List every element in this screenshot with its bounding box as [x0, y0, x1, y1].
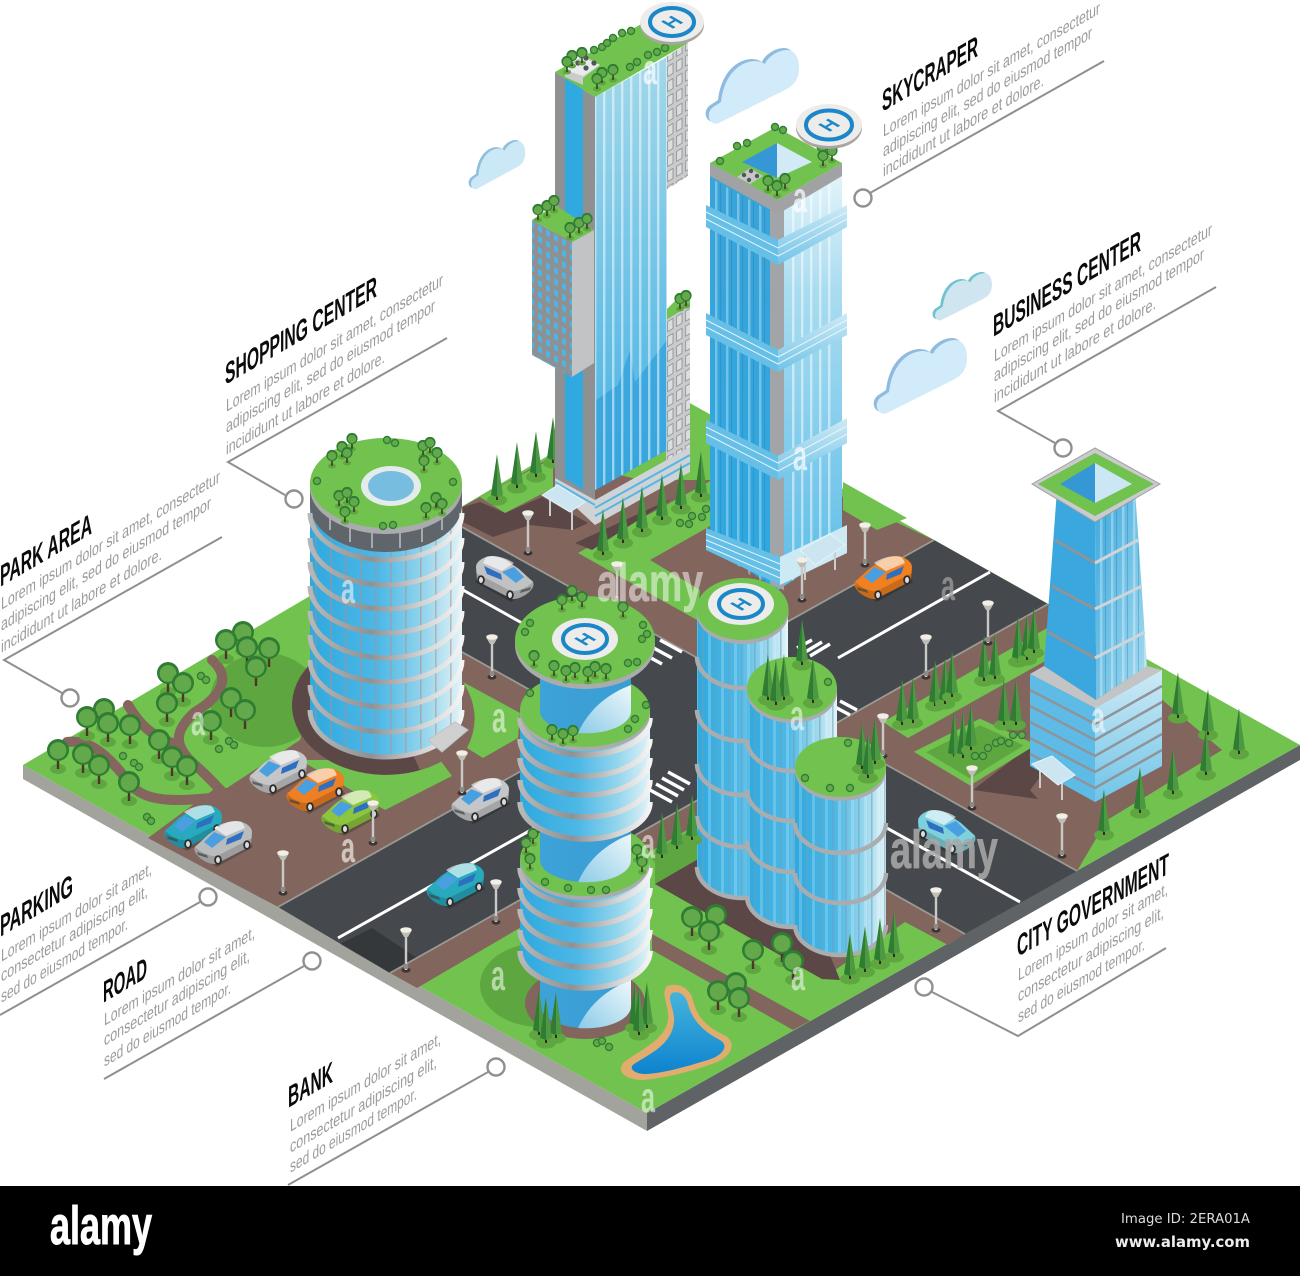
side block trees — [532, 195, 692, 312]
helipad: H — [570, 630, 602, 649]
helipad — [552, 618, 618, 660]
label: city government: consectetur adipiscing elit, — [1018, 903, 1164, 1007]
building: bank — [515, 585, 655, 1039]
base band — [706, 525, 847, 585]
building: city government stepped cylinders — [696, 578, 886, 955]
shopping centre base ring — [292, 635, 480, 775]
stock watermarks: alamy — [890, 820, 998, 880]
stock watermarks: alamy — [597, 553, 703, 613]
neck 3 — [540, 960, 631, 1028]
stock watermarks: a — [1091, 694, 1106, 742]
stock watermarks: a — [341, 824, 356, 872]
upper terrace plants — [526, 689, 650, 746]
label: road: consectetur adipiscing elit, — [104, 946, 250, 1051]
base stripes — [555, 447, 690, 525]
corner column — [770, 196, 784, 590]
roof pool — [361, 466, 421, 506]
band 1 — [706, 205, 847, 265]
roof trees — [561, 27, 669, 91]
roof — [555, 22, 688, 97]
cylinder C — [795, 737, 886, 955]
south trees behind towers — [681, 904, 764, 974]
building: centre skyscraper — [706, 104, 862, 590]
platform side left — [23, 765, 647, 1131]
north-east lawn corner — [843, 482, 907, 530]
dark storey posts — [330, 505, 442, 548]
label: shopping center: incididunt ut labore et dolore. — [226, 347, 385, 460]
glass reflection — [596, 340, 667, 490]
roof trees — [716, 123, 838, 198]
stock watermarks: a — [641, 1074, 656, 1122]
label: bank: sed do eiusmod tempor. — [290, 1084, 417, 1178]
podium — [1030, 666, 1162, 802]
band 2 — [706, 313, 847, 372]
road 1 — [335, 517, 1077, 934]
green terrace lower — [520, 826, 650, 900]
road shadow — [340, 928, 417, 973]
street lamps west — [277, 634, 502, 973]
dark upper storey — [310, 483, 462, 552]
label: bank: Lorem ipsum dolor sit amet, — [290, 1029, 441, 1137]
label: road: sed do eiusmod tempor. — [104, 978, 231, 1072]
upper right wing — [666, 43, 688, 190]
label: shopping center: Lorem ipsum dolor sit amet, consectetur — [226, 270, 443, 417]
pond — [621, 985, 732, 1080]
roof — [710, 127, 842, 200]
building: left skyscraper — [532, 2, 704, 530]
right glass face — [778, 163, 842, 590]
stock watermarks: a — [643, 46, 658, 94]
label: parking: consectetur adipiscing elit, — [1, 881, 148, 987]
label: park area: adipiscing elit, sed do eiusmod tempor — [1, 493, 211, 636]
trees on cylinder B — [758, 619, 832, 710]
label: park area: PARK AREA — [0, 506, 92, 593]
isometric city base platform — [23, 388, 1300, 1131]
shaft right — [1095, 490, 1147, 700]
label: city government: sed do eiusmod tempor. — [1018, 935, 1145, 1028]
lower terrace plants — [520, 828, 648, 894]
north lawn strip — [480, 458, 553, 513]
building: city government tower — [1030, 448, 1162, 802]
road centre lines — [338, 572, 1020, 938]
south diagonal path — [652, 934, 810, 1030]
east lawn strip — [883, 628, 1047, 738]
label: business center: adipiscing elit, sed do eiusmod tempor — [994, 244, 1204, 387]
label: business center — [993, 220, 1216, 456]
north lawn under skyscrapers — [553, 388, 712, 620]
label: skyscraper — [854, 0, 1104, 206]
roof skylight — [742, 143, 812, 178]
west paving along roads — [148, 581, 598, 907]
neck 2 — [540, 790, 631, 882]
north quadrant paving — [444, 395, 934, 665]
park paths — [67, 660, 225, 800]
hvac block — [565, 55, 600, 85]
helipad: H — [657, 13, 689, 32]
label: road: ROAD — [103, 950, 147, 1009]
glass face — [595, 57, 667, 490]
glass body — [310, 483, 462, 757]
stock watermarks: a — [492, 694, 507, 742]
trees on cylinder C — [801, 718, 885, 792]
roof edge — [710, 163, 842, 214]
label: shopping center: adipiscing elit, sed do eiusmod tempor — [226, 296, 435, 438]
south cones lawn — [655, 825, 700, 884]
floor rings — [310, 513, 462, 757]
stock watermarks: a — [191, 697, 206, 745]
label: bank: consectetur adipiscing elit, — [290, 1052, 437, 1158]
shaft left — [1044, 490, 1096, 700]
zebra crossings — [640, 640, 857, 802]
bottom stock bar — [0, 1186, 1300, 1276]
stock watermarks: a — [791, 952, 806, 1000]
band 3 — [706, 418, 847, 480]
image id: Image ID: 2ERA01A — [1121, 1211, 1251, 1227]
top frame — [1032, 448, 1160, 522]
top disc plants — [521, 585, 651, 684]
entry canopy — [800, 534, 845, 580]
label: park area: Lorem ipsum dolor sit amet, consectetur — [1, 467, 220, 615]
east garden plot — [920, 722, 1030, 782]
label: city government — [916, 846, 1169, 1036]
label: park area: incididunt ut labore et dolore. — [1, 544, 162, 658]
shaft floor lines — [1048, 540, 1145, 658]
stock logo: alamy — [50, 1196, 152, 1256]
label: city government: CITY GOVERNMENT — [1017, 846, 1169, 964]
canopy — [1032, 756, 1075, 800]
label: parking: PARKING — [0, 867, 73, 943]
floors lower — [520, 859, 650, 988]
base ring — [525, 967, 645, 1039]
cloud: top centre — [706, 48, 799, 124]
entrance — [428, 722, 468, 752]
roof disc — [310, 442, 462, 534]
helipad — [796, 104, 862, 149]
bank base cones — [529, 982, 657, 1051]
green terrace upper — [520, 677, 650, 751]
label: shopping center — [225, 269, 447, 508]
cone trees at skyscraper foot — [593, 451, 711, 560]
stock watermarks: a — [793, 174, 808, 222]
stock watermarks: a — [341, 565, 356, 613]
building: shopping center — [310, 433, 468, 757]
label: business center: BUSINESS CENTER — [993, 224, 1141, 343]
side wing block in front of left face — [532, 220, 572, 377]
park trees and bushes — [47, 621, 280, 825]
stock watermarks: a — [790, 692, 805, 740]
stock watermarks: a — [491, 952, 506, 1000]
website: www.alamy.com — [1115, 1233, 1250, 1251]
helipad on cylinder A: H — [726, 595, 758, 614]
floors upper — [520, 710, 650, 839]
stock watermarks — [191, 46, 1106, 1122]
small lawn by parking — [300, 760, 452, 810]
helipad: H — [814, 116, 846, 135]
entry canopy — [542, 485, 585, 530]
front right cone trees and lamps — [877, 713, 1216, 840]
roof trees — [313, 433, 457, 530]
platform green top — [23, 388, 1300, 1113]
tower plot paving — [1030, 700, 1222, 838]
cloud: small right — [933, 272, 992, 320]
neck 1 — [540, 660, 631, 733]
north paving shadows — [463, 497, 588, 537]
cloud: small left — [469, 140, 525, 189]
lower right wing — [666, 295, 690, 465]
left face — [555, 72, 595, 525]
road 2 — [278, 540, 1048, 973]
stock watermarks: a — [941, 562, 956, 610]
label: skyscraper: incididunt ut labore et dolore. — [883, 69, 1044, 181]
east plot shadow — [973, 746, 1100, 800]
cars on road east — [427, 556, 975, 909]
label: road: Lorem ipsum dolor sit amet, — [104, 923, 255, 1031]
left glass face — [710, 163, 778, 590]
label: parking: sed do eiusmod tempor. — [1, 914, 128, 1008]
top disc — [515, 601, 655, 689]
stock watermarks: a — [641, 820, 656, 868]
lawn beside shopping centre — [463, 682, 520, 758]
south quadrant paving along road — [390, 792, 735, 988]
cloud: large right — [874, 338, 967, 414]
cars in parking lot — [165, 750, 380, 867]
cylinder B — [747, 657, 837, 927]
south dark shadow under cylinders — [655, 792, 965, 979]
hvac — [737, 168, 763, 184]
helipad on cylinder A — [708, 583, 774, 625]
label: parking: Lorem ipsum dolor sit amet, — [1, 859, 152, 967]
road edges — [278, 517, 1077, 973]
label: shopping center: SHOPPING CENTER — [225, 269, 377, 391]
label: park area — [0, 467, 222, 706]
helipad — [640, 2, 704, 45]
bank dark lawn — [480, 943, 600, 1027]
west lawn dark patch — [210, 653, 320, 747]
stock watermarks: a — [793, 432, 808, 480]
platform side right — [647, 745, 1300, 1131]
label: business center: Lorem ipsum dolor sit amet, consectetur — [994, 220, 1212, 367]
label: city government: Lorem ipsum dolor sit amet, — [1018, 879, 1168, 986]
north cone trees — [487, 417, 563, 506]
label: bank: BANK — [288, 1055, 333, 1114]
east side cone trees, lamps — [522, 510, 1249, 933]
foreground trees south — [652, 794, 904, 1022]
label: business center: incididunt ut labore et dolore. — [994, 293, 1156, 408]
cylinder A — [696, 578, 788, 898]
east quadrant paving — [824, 604, 1222, 871]
